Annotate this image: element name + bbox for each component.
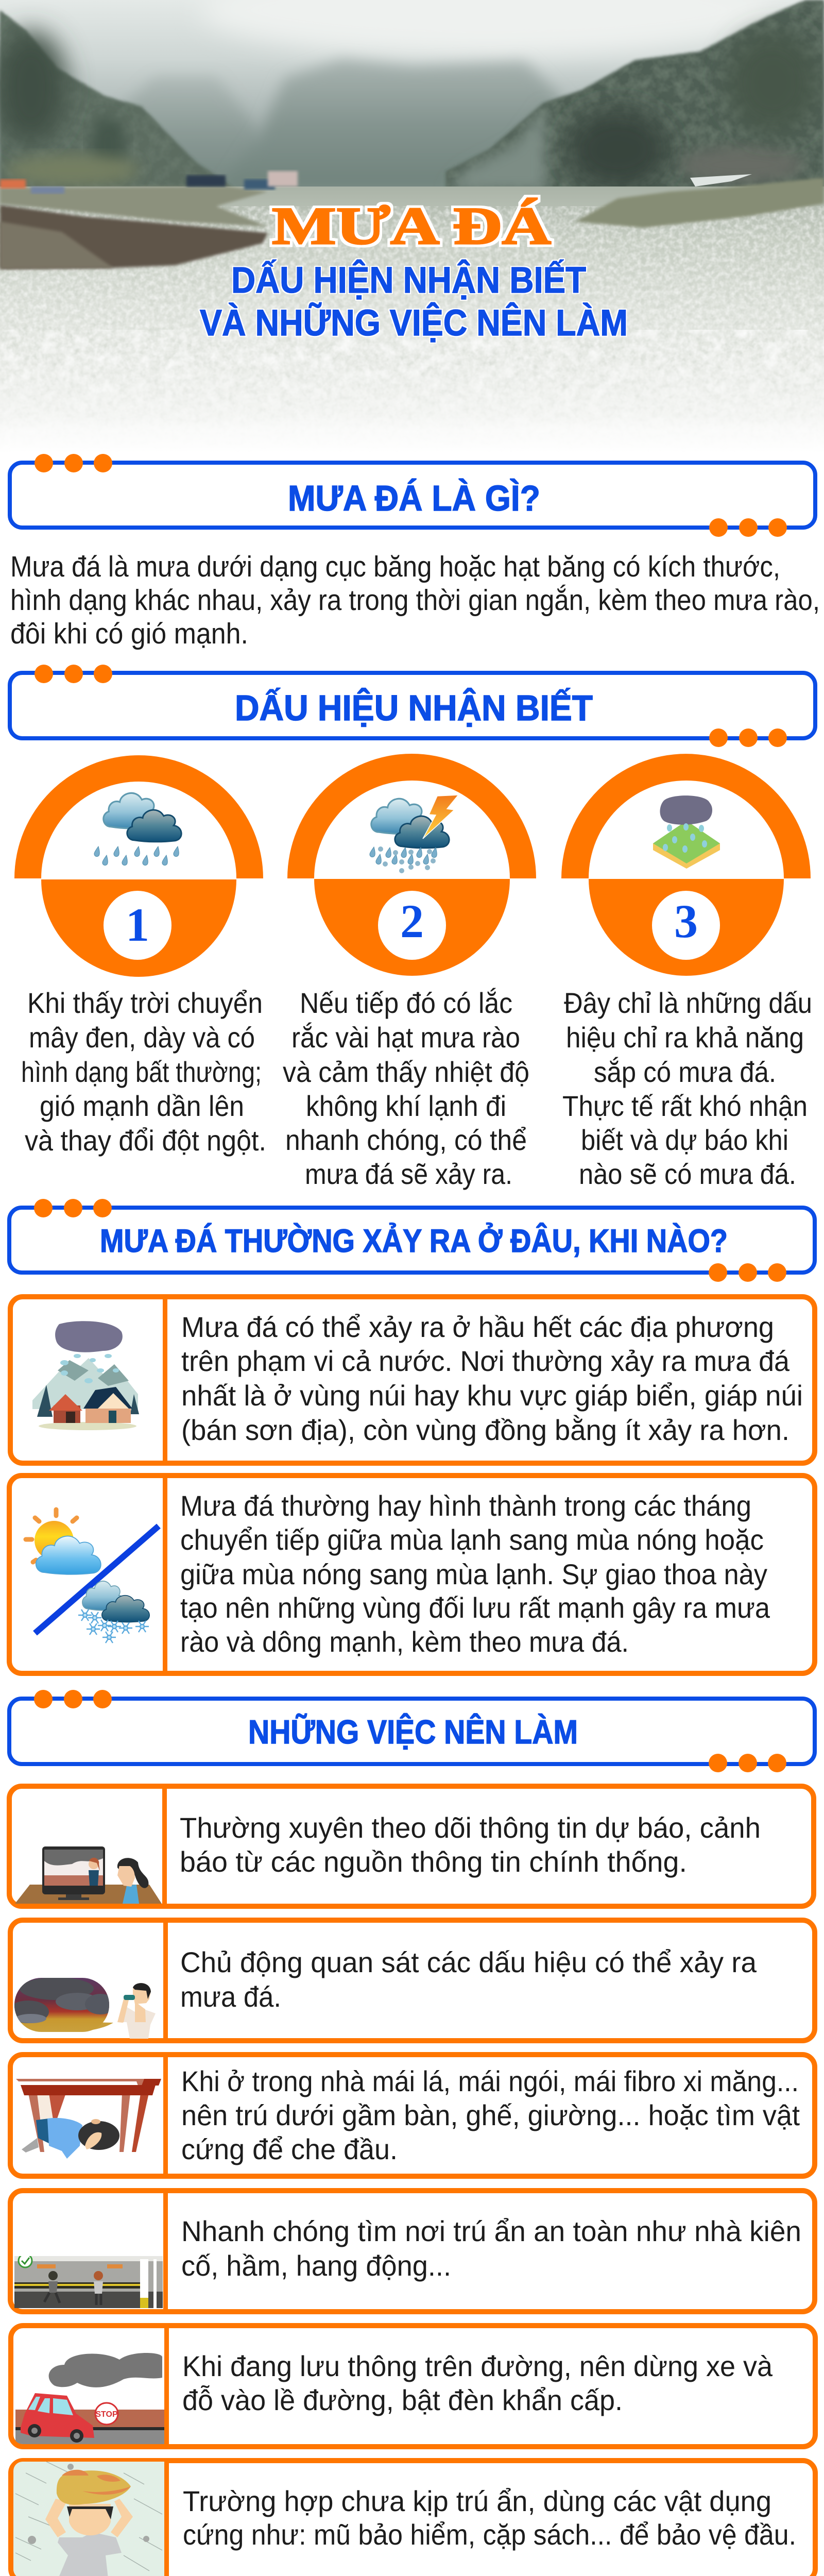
- section heading: Mưa đá là gì: MƯA ĐÁ LÀ GÌ?: [288, 478, 540, 518]
- icon: car stopped under storm cloud: STOP: [95, 2410, 118, 2419]
- sign 2 badge: [287, 754, 536, 976]
- panel: observe signs: [8, 1920, 815, 2041]
- text: where: nhất là ở vùng núi hay khu vực giáp biển, giáp núi: [181, 1379, 803, 1412]
- sign 1 badge: 1: [126, 899, 149, 951]
- sign 1 text: mây đen, dày và có: [29, 1021, 255, 1054]
- text: under furniture: [181, 2065, 800, 2165]
- sign 3 text: hiệu chỉ ra khả năng: [566, 1021, 804, 1054]
- sign 2 text: [283, 987, 529, 1190]
- definition paragraph: đôi khi có gió mạnh.: [10, 617, 248, 650]
- text: protect head: Trường hợp chưa kịp trú ẩn, dùng các vật dụng: [183, 2485, 771, 2517]
- title: MƯA ĐÁ: MƯA ĐÁ: [272, 197, 551, 256]
- section heading: what to do: [9, 1690, 815, 1772]
- panel: stop vehicle: [11, 2326, 815, 2447]
- sign 1 text: gió mạnh dần lên: [40, 1090, 244, 1122]
- text: forecasts: báo từ các nguồn thông tin chính thống.: [180, 1845, 687, 1878]
- text: forecasts: Thường xuyên theo dõi thông tin dự báo, cảnh: [180, 1811, 761, 1844]
- sign 1 text: và thay đổi đột ngột.: [25, 1124, 266, 1157]
- sign 3 badge: 3: [674, 895, 698, 947]
- subtitle: DẤU HIỆN NHẬN BIẾT: [231, 260, 586, 301]
- sign 3 badge: [561, 754, 811, 976]
- text: when: rào và dông mạnh, kèm theo mưa đá.: [180, 1625, 629, 1658]
- sign 1 text: Khi thấy trời chuyển: [27, 987, 263, 1019]
- sign 1 badge: [14, 755, 263, 977]
- icon: rain clouds: [94, 793, 181, 866]
- panel: shelter under furniture: [10, 2055, 815, 2176]
- sign 2 text: Nếu tiếp đó có lắc: [300, 987, 512, 1019]
- panel: protect head: [11, 2461, 815, 2576]
- icon: man covering head with a bag: [13, 2462, 164, 2576]
- icon: storm cloud with lightning and hail: [370, 795, 458, 873]
- icon: hail on a land plot: [653, 795, 720, 869]
- section heading: where and when: MƯA ĐÁ THƯỜNG XẢY RA Ở ĐÂU, KHI NÀO?: [100, 1223, 728, 1259]
- text: observe: Chủ động quan sát các dấu hiệu có thể xảy ra: [180, 1946, 757, 1978]
- section heading: Dấu hiệu nhận biết: [10, 665, 815, 747]
- text: when: Mưa đá thường hay hình thành trong các tháng: [180, 1489, 751, 1522]
- sign 3 text: [562, 987, 812, 1190]
- sign 2 text: nhanh chóng, có thể: [285, 1124, 527, 1156]
- sign 2 text: không khí lạnh đi: [306, 1090, 506, 1122]
- icon: sun and cloud versus cold snow cloud: [26, 1510, 159, 1643]
- text: stop vehicle: [182, 2350, 773, 2416]
- text: where: [181, 1311, 803, 1446]
- icon: person under table: [16, 2079, 161, 2159]
- subtitle: [200, 260, 628, 344]
- text: where: trên phạm vi cả nước. Nơi thường xảy ra mưa đá: [181, 1345, 790, 1377]
- text: when: [180, 1489, 770, 1658]
- sign 2 text: mưa đá sẽ xảy ra.: [305, 1158, 512, 1190]
- text: when: giữa mùa nóng sang mùa lạnh. Sự giao thoa này: [180, 1558, 767, 1590]
- text: observe: [180, 1946, 757, 2013]
- icon: people running to shelter: [14, 2254, 163, 2308]
- sign 2 text: rắc vài hạt mưa rào: [291, 1021, 520, 1054]
- panel: find safe shelter: [10, 2191, 815, 2312]
- subtitle: VÀ NHỮNG VIỆC NÊN LÀM: [200, 302, 628, 344]
- section heading: where and when: [9, 1199, 815, 1282]
- sign 1 text: [21, 987, 266, 1157]
- sign 3 text: Thực tế rất khó nhận: [562, 1090, 808, 1122]
- sign 3 text: biết và dự báo khi: [581, 1124, 788, 1156]
- section heading: what to do: NHỮNG VIỆC NÊN LÀM: [248, 1713, 578, 1751]
- text: where: Mưa đá có thể xảy ra ở hầu hết các địa phương: [181, 1311, 774, 1343]
- icon: man with binoculars and storm speech bubble: [8, 1977, 156, 2039]
- text: shelter: Nhanh chóng tìm nơi trú ẩn an toàn như nhà kiên: [181, 2215, 801, 2247]
- section heading: Mưa đá là gì: [10, 454, 815, 537]
- panel: when hail occurs: [9, 1476, 815, 1673]
- text: protect head: [183, 2485, 796, 2551]
- text: stop vehicle: Khi đang lưu thông trên đường, nên dừng xe và: [182, 2350, 773, 2382]
- text: when: chuyển tiếp giữa mùa lạnh sang mùa nóng hoặc: [180, 1523, 764, 1556]
- sign 3 text: sắp có mưa đá.: [594, 1056, 776, 1088]
- text: when: tạo nên những vùng đối lưu rất mạnh gây ra mưa: [180, 1591, 770, 1624]
- sign 3 text: nào sẽ có mưa đá.: [579, 1158, 796, 1190]
- definition paragraph: [10, 550, 820, 650]
- icon: woman watching TV forecast: [15, 1846, 162, 1904]
- text: where: (bán sơn địa), còn vùng đồng bằng ít xảy ra hơn.: [181, 1414, 789, 1446]
- text: shelter: cố, hầm, hang động...: [181, 2249, 451, 2282]
- panel: where hail occurs: [10, 1297, 815, 1463]
- sign 2 text: và cảm thấy nhiệt độ: [283, 1056, 529, 1088]
- panel: follow forecasts: [9, 1786, 814, 1906]
- icon: hail over mountains and houses: [32, 1321, 139, 1430]
- sign 1 text: hình dạng bất thường;: [21, 1056, 262, 1088]
- text: forecasts: [180, 1811, 761, 1878]
- icon: car stopped under storm cloud: [15, 2353, 165, 2446]
- text: observe: mưa đá.: [180, 1980, 281, 2013]
- header photo: hail-covered valley in fog: [0, 0, 824, 459]
- text: under furniture: nên trú dưới gầm bàn, ghế, giường... hoặc tìm vật: [181, 2099, 800, 2131]
- text: shelter: [181, 2215, 801, 2282]
- text: under furniture: cứng để che đầu.: [181, 2133, 398, 2165]
- sign 2 badge: 2: [400, 895, 424, 947]
- text: stop vehicle: đỗ vào lề đường, bật đèn khẩn cấp.: [182, 2384, 623, 2416]
- section heading: Dấu hiệu nhận biết: DẤU HIỆU NHẬN BIẾT: [235, 687, 593, 728]
